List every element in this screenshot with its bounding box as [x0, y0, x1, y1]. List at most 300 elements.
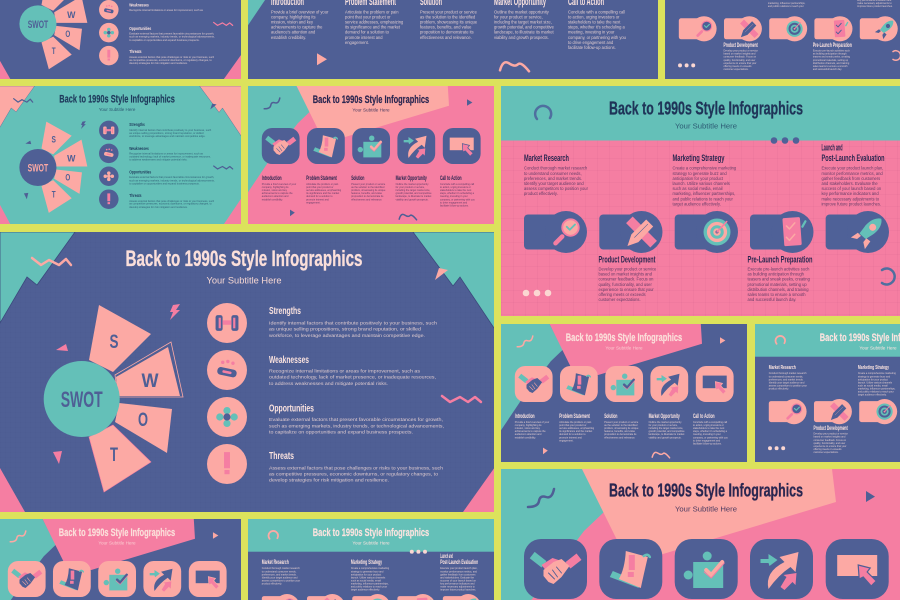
subtitle: Your Subtitle Here: [99, 107, 136, 112]
column: launch evaluation: Execute your product launch plan,: [822, 166, 883, 171]
swot text: Assess external factors that pose challenges or risks to your business, such: [129, 200, 215, 203]
column texts: achievements to capture the: [271, 25, 323, 30]
lower column text: Product Development: [724, 43, 758, 49]
title: Back to 1990s Style Infographics: [566, 332, 682, 344]
swot text: to capitalize on opportunities and expand business prospects.: [129, 182, 200, 185]
column texts: landscape, to illustrate its market: [396, 195, 432, 198]
lightning: [170, 304, 180, 320]
column texts: Present your product or service: [420, 9, 478, 14]
product development text: Develop your product or service: [813, 433, 849, 436]
swot text: as competitive pressures, economic downturns, or regulatory changes, to: [129, 203, 213, 206]
column: pre-launch preparation: [748, 254, 812, 302]
SWOT hub and wedges: [19, 0, 87, 69]
column: launch evaluation: [822, 143, 884, 206]
hub circle: [44, 361, 120, 437]
icon: weaknesses: [207, 350, 247, 390]
column texts: Execute your product launch plan,: [440, 567, 478, 570]
column texts: promote interest and: [559, 436, 582, 439]
tail of top column text: make necessary adjustments to: [857, 2, 892, 5]
dots: [410, 550, 427, 554]
slide: five-step navy: [501, 324, 747, 462]
title: Back to 1990s Style Infographics: [609, 481, 803, 501]
column text: Conduct thorough market research: [769, 372, 807, 375]
pink corner bottom-left: [0, 468, 25, 512]
text: weaknesses, opportunities, threats: develop strategies for risk mitigation and resilience.: [129, 62, 188, 65]
lower column text: as building anticipation through: [813, 53, 847, 56]
column: product development: based on market insights and: [598, 272, 653, 277]
column text: Create a comprehensive marketing: [858, 372, 896, 375]
column texts: Outline the market opportunity: [494, 9, 550, 14]
text: opportunities: to capitalize on opportunities and expand business prospects.: [269, 430, 413, 435]
column: launch evaluation: gather feedback from customers: [822, 176, 880, 181]
column texts: Marketing Strategy: [351, 560, 382, 566]
zigzag right: [442, 396, 481, 402]
column texts: Conclude with a compelling call: [440, 183, 475, 186]
column text: and public relations to reach your: [858, 391, 894, 394]
column text: such as social media, email: [858, 384, 888, 387]
text: threats: as competitive pressures, economic downturns, or regulatory changes, to: [269, 471, 438, 476]
text: weaknesses: Weaknesses: [269, 355, 309, 366]
icon discs: [99, 121, 119, 209]
column texts: audience's attention and: [515, 433, 542, 436]
icon tiles: [515, 366, 734, 402]
swot text: Evaluate external factors that present favorable circumstances for growth,: [129, 176, 215, 179]
column: marketing strategy: and public relations to reach your: [672, 196, 733, 201]
column: market research: assess competitors to position your: [524, 186, 589, 191]
column text: [769, 365, 896, 397]
column: marketing strategy: Create a comprehensive marketing: [672, 166, 737, 171]
column texts: promote interest and: [345, 35, 383, 40]
column texts: achievements to capture the: [515, 430, 546, 433]
decorations: [264, 98, 472, 220]
column texts: including the target market size,: [649, 427, 684, 430]
salmon title shape: [297, 86, 449, 137]
column: market research: preferences, and market trends.: [524, 176, 582, 181]
text: opportunities: [269, 404, 444, 435]
column texts: features, benefits, and value: [351, 192, 383, 195]
column texts: assess competitors to position your: [262, 579, 300, 582]
column texts: Market Opportunity: [649, 413, 680, 420]
column texts: as the solution to the identified: [604, 424, 638, 427]
text: strengths: workforce, to leverage advantages and maintain competitive edge.: [269, 333, 425, 338]
column texts: steps, whether it's scheduling a: [693, 430, 728, 433]
tile: arrows: [750, 539, 813, 599]
product development text: offering meets or exceeds: [813, 448, 842, 451]
column texts: [515, 413, 728, 445]
column texts: launch. Utilize various channels: [351, 576, 386, 579]
slide: roadmap thumbnail top-right: [665, 0, 900, 79]
column texts: company, highlighting its: [271, 14, 316, 19]
lower column text: and successful launch day.: [813, 68, 842, 71]
column: pre-launch preparation: Execute pre-launch activities such: [748, 266, 810, 272]
column texts: key performance indicators and: [440, 583, 475, 586]
teal shape: [501, 324, 563, 430]
corner shapes: [0, 54, 242, 79]
text: threats: develop strategies for risk mitigation and resilience.: [269, 478, 389, 483]
wedge W: [115, 342, 183, 397]
swot text: workforce, to leverage advantages and maintain competitive edge.: [129, 135, 206, 138]
swot text: outdated technology, lack of market presence, or inadequate resources,: [129, 156, 211, 159]
column: market research: to understand consumer needs,: [524, 171, 582, 176]
column text: product effectively.: [769, 388, 789, 391]
column text: marketing, influencer partnerships,: [858, 388, 896, 391]
header dots: [771, 137, 799, 144]
column: pre-launch preparation: promotional materials, setting up: [748, 282, 807, 287]
column texts: as the solution to the identified: [420, 14, 476, 19]
tile: puzzle: [675, 539, 738, 599]
column texts: strategy to generate buzz and: [351, 570, 384, 573]
slide: five-step pink large: [501, 469, 900, 600]
product development text: Product Development: [813, 426, 848, 432]
subtitle: Your Subtitle Here: [98, 540, 136, 545]
text: weaknesses, opportunities, threats: Assess external factors that pose challenges or risks to your business, such: [129, 56, 215, 59]
column texts: Articulate the problem or pain: [345, 9, 399, 14]
column texts: marketing, influencer partnerships,: [351, 583, 389, 586]
teal shape: [501, 469, 604, 600]
ring decoration: [535, 106, 551, 119]
subtitle: Your Subtitle Here: [352, 107, 390, 112]
step tabs: [262, 594, 481, 600]
column texts: Problem Statement: [559, 413, 590, 420]
slide: SWOT thumbnail top-left: [0, 0, 241, 79]
column texts: engagement.: [345, 40, 369, 45]
column texts: service addresses, emphasizing: [306, 189, 342, 192]
column texts: to drive engagement and: [440, 201, 468, 204]
column: marketing strategy: marketing, influencer partnerships,: [672, 191, 735, 196]
text: weaknesses, opportunities, threats: Recognize internal limitations or areas for improvement, such as: [129, 9, 204, 12]
column texts: company, highlighting its: [515, 424, 542, 427]
title: Back to 1990s Style Infographics: [313, 94, 429, 106]
column: marketing strategy: [672, 153, 737, 206]
wedge S: [89, 305, 151, 372]
column texts: gather feedback from customers: [440, 573, 476, 576]
column texts: mission, vision and key: [515, 427, 541, 430]
column texts: facilitate follow-up actions.: [440, 204, 469, 207]
swot text: such as emerging markets, industry trends, or technological advancements,: [129, 179, 215, 182]
column texts: effectiveness and relevance.: [351, 198, 383, 201]
column texts: service addresses, emphasizing: [559, 427, 595, 430]
title: Back to 1990s Style Infographics: [313, 527, 429, 539]
lower column text: offering meets or exceeds: [724, 65, 752, 68]
corner shapes: [0, 86, 242, 224]
column text: launch. Utilize various channels: [858, 381, 893, 384]
column texts: problem, showcasing its unique: [420, 20, 478, 24]
column texts: proposition to demonstrate its: [351, 195, 384, 198]
subtitle: Your Subtitle Here: [675, 121, 737, 130]
slide: SWOT main navy: [0, 232, 494, 512]
column texts: Outline the market opportunity: [649, 421, 682, 424]
column texts: meeting, investing in your: [693, 433, 721, 436]
column: pre-launch preparation: sales teams to ensure a smooth: [748, 292, 806, 297]
column texts: Outline the market opportunity: [396, 183, 429, 186]
column texts: company, highlighting its: [262, 186, 289, 189]
column texts: achievements to capture the: [262, 192, 293, 195]
column texts: proposition to demonstrate its: [604, 433, 637, 436]
icon: opportunities: [207, 397, 247, 437]
column: launch evaluation: Launch and: [822, 143, 842, 153]
text: threats: [269, 451, 443, 483]
column: launch evaluation: monitor performance metrics, and: [822, 171, 883, 176]
column texts: anticipation for your product: [351, 573, 381, 576]
lower column text: Execute pre-launch activities such: [813, 50, 850, 53]
column texts: to drive engagement and: [693, 439, 721, 442]
column texts: engagement.: [559, 439, 574, 442]
subtitle: Your Subtitle Here: [206, 275, 282, 285]
text: opportunities: Opportunities: [269, 404, 314, 415]
lower column text: quality, functionality, and user: [724, 59, 755, 62]
product development text: based on market insights and: [813, 436, 846, 439]
teal header band: [501, 86, 900, 140]
slide: roadmap navy bottom-middle: [248, 519, 494, 600]
text: weaknesses, opportunities, threats: as competitive pressures, economic downturns, or regulatory changes, to: [129, 59, 212, 62]
column texts: steps, whether it's scheduling a: [440, 192, 475, 195]
swot text: Threats: [129, 193, 142, 199]
tail of top column text: improve future product launches.: [857, 5, 893, 8]
wedge T: [89, 425, 151, 492]
column texts: point that your product or: [345, 14, 391, 19]
column texts: establish credibility.: [271, 35, 306, 40]
column texts: including the target market size,: [494, 20, 552, 24]
column texts: point that your product or: [306, 186, 334, 189]
product development text: quality, functionality, and user: [813, 442, 845, 445]
column: product development: [598, 254, 657, 302]
title: Back to 1990s Style Infographics: [59, 527, 175, 539]
zigzag top-left: [32, 258, 71, 265]
ring decoration: [893, 51, 900, 60]
teal shape: [248, 0, 351, 25]
column: product development: consumer feedback. Focus on: [598, 277, 654, 282]
column: marketing strategy: target audience effectively.: [672, 201, 721, 206]
triangle top-right: [435, 268, 448, 280]
lower column text: based on market insights and: [724, 53, 756, 56]
column: market research: Identify your target audience and: [524, 181, 584, 186]
subtitle: Your Subtitle Here: [675, 504, 737, 513]
arrow decoration: [317, 53, 327, 65]
column texts: its significance and the market: [345, 25, 401, 30]
column texts: for your product or service,: [494, 14, 543, 19]
column texts: point that your product or: [559, 424, 587, 427]
decorations: [10, 531, 218, 542]
column texts: demand for a solution to: [559, 433, 586, 436]
column texts: to action, urging investors or: [440, 186, 471, 189]
teal shape: [248, 86, 310, 192]
text: strengths: [269, 306, 437, 338]
pink title shape: [43, 519, 195, 570]
icon tiles: [8, 561, 227, 597]
text: strengths: as unique selling propositions, strong brand reputation, or skilled: [269, 327, 421, 332]
column texts: [271, 0, 626, 50]
column: product development: customer expectations.: [598, 297, 641, 302]
text: weaknesses: outdated technology, lack of market presence, or inadequate resources,: [269, 375, 436, 380]
column texts: as the solution to the identified: [351, 186, 385, 189]
text: weaknesses: Recognize internal limitations or areas for improvement, such as: [269, 369, 421, 374]
column: marketing strategy: strategy to generate buzz and: [672, 171, 727, 176]
slide: SWOT teal left: [0, 86, 241, 224]
column texts: engagement.: [306, 201, 321, 204]
column texts: its significance and the market: [306, 192, 340, 195]
icon: strengths: [207, 303, 247, 343]
column texts: [262, 554, 478, 592]
swot text: develop strategies for risk mitigation and resilience.: [129, 206, 188, 209]
text: weaknesses: to address weaknesses and mitigate potential risks.: [269, 381, 388, 386]
title: Back to 1990s Style Infographics: [126, 246, 362, 271]
column texts: Market Opportunity: [396, 175, 427, 182]
text: weaknesses, opportunities, threats: Opportunities: [129, 26, 151, 32]
column texts: facilitate follow-up actions.: [568, 45, 616, 50]
column texts: stakeholders to take the next: [440, 189, 472, 192]
column texts: Provide a brief overview of your: [262, 183, 296, 186]
tail of top column text: [768, 0, 893, 8]
lower column text: [724, 43, 852, 71]
column: marketing strategy: launch. Utilize various channels: [672, 181, 730, 186]
column: market research: product effectively.: [524, 191, 558, 196]
column texts: viability and growth prospects.: [396, 198, 429, 201]
light dots: [523, 290, 551, 296]
slide: five-step thumbnail top-middle: [248, 0, 658, 79]
column texts: and public relations to reach your: [351, 586, 387, 589]
column texts: and stakeholders. Evaluate the: [440, 576, 475, 579]
product development text: [813, 426, 849, 454]
column: marketing strategy: such as social media, email: [672, 186, 723, 191]
column texts: to action, urging investors or: [568, 14, 620, 19]
lower column text: customer expectations.: [724, 68, 749, 71]
column: launch evaluation: make necessary adjustments to: [822, 196, 880, 201]
lower column text: experience to ensure that your: [724, 62, 757, 65]
lower column text: promotional materials, setting up: [813, 59, 849, 62]
lower column text: Pre-Launch Preparation: [813, 43, 852, 49]
column texts: to drive engagement and: [568, 40, 614, 45]
column texts: to action, urging investors or: [693, 424, 724, 427]
slide: roadmap pink right: [501, 86, 900, 316]
product development text: consumer feedback. Focus on: [813, 439, 847, 442]
product development text: experience to ensure that your: [813, 445, 847, 448]
column texts: viability and growth prospects.: [649, 436, 682, 439]
text: strengths: Strengths: [269, 306, 301, 317]
column texts: product effectively.: [262, 583, 282, 586]
column texts: features, benefits, and value: [420, 25, 472, 30]
SWOT diagram: T: [52, 190, 56, 200]
column texts: mission, vision and key: [262, 189, 288, 192]
column: marketing strategy: anticipation for your product: [672, 176, 724, 181]
column texts: make necessary adjustments to: [440, 586, 475, 589]
swot text: [129, 122, 215, 209]
column text: target audience effectively.: [858, 394, 887, 397]
play triangle: [866, 491, 875, 502]
column texts: company, or partnering with you: [440, 198, 475, 201]
title: Back to 1990s Style Infographics: [59, 94, 175, 106]
letter O: O: [138, 410, 148, 431]
swot text: Recognize internal limitations or areas for improvement, such as: [129, 153, 204, 156]
SWOT hub and wedges: T: [52, 46, 56, 56]
slide: five-step navy bottom-left: [0, 519, 241, 600]
column texts: Solution: [604, 413, 617, 420]
salmon title shape: [582, 469, 836, 554]
column texts: problem, showcasing its unique: [604, 427, 639, 430]
subtitle: Your Subtitle Here: [352, 540, 390, 545]
column texts: Provide a brief overview of your: [515, 421, 549, 424]
column: launch evaluation: and stakeholders. Evaluate the: [822, 181, 878, 186]
tile: click: [826, 539, 889, 599]
teal header band: [248, 519, 500, 552]
SWOT hub and wedges: W: [67, 10, 76, 20]
column texts: Articulate the problem or pain: [559, 421, 592, 424]
column texts: target audience effectively.: [351, 589, 380, 592]
SWOT diagram: [44, 305, 183, 492]
column texts: effectiveness and relevance.: [420, 35, 472, 40]
text: weaknesses, opportunities, threats: Weaknesses: [129, 2, 149, 8]
column texts: establish credibility.: [262, 198, 283, 201]
column: product development: Develop your product or service: [598, 266, 657, 272]
column texts: establish credibility.: [515, 436, 536, 439]
step tabs with icons: [769, 399, 897, 424]
lower column text: sales teams to ensure a smooth: [813, 65, 848, 68]
product development text: customer expectations.: [813, 451, 839, 454]
tile: scroll: [599, 539, 662, 599]
pink title shape: [550, 324, 702, 375]
text: threats: Assess external factors that pose challenges or risks to your business, such: [269, 465, 443, 470]
column texts: company, or partnering with you: [568, 35, 626, 40]
column: market research: [524, 153, 589, 196]
decorations: [14, 99, 233, 199]
column texts: landscape, to illustrate its market: [649, 433, 685, 436]
column texts: growth potential, and competitive: [494, 25, 555, 30]
column texts: Problem Statement: [306, 175, 337, 182]
column texts: facilitate follow-up actions.: [693, 442, 722, 445]
tail of top column text: and public relations to reach your: [768, 5, 804, 8]
SWOT diagram: S: [51, 135, 56, 145]
column text: strategy to generate buzz and: [858, 375, 891, 378]
column texts: steps, whether it's scheduling a: [568, 25, 625, 30]
decorations: [517, 336, 725, 458]
column texts: for your product or service,: [396, 186, 425, 189]
column: market research: Market Research: [524, 153, 569, 163]
column texts: landscape, to illustrate its market: [494, 30, 554, 35]
column texts: Create a comprehensive marketing: [351, 567, 390, 570]
column: pre-launch preparation: and successful launch day.: [748, 297, 796, 302]
column: pre-launch preparation: as building anticipation through: [748, 272, 805, 277]
column texts: Articulate the problem or pain: [306, 183, 339, 186]
triangle lower-left: [53, 451, 62, 464]
squiggle: [528, 489, 554, 507]
column texts: Introduction: [515, 413, 535, 420]
column: product development: quality, functionality, and user: [598, 282, 652, 287]
tile: handshake: [524, 539, 587, 599]
column texts: Introduction: [262, 175, 282, 182]
column texts: stakeholders to take the next: [568, 20, 621, 24]
title: Back to 1990s Style Infographics: [609, 98, 803, 118]
column: product development: Product Development: [598, 254, 656, 264]
column: pre-launch preparation: distribution channels, and training: [748, 287, 809, 292]
dots: [678, 63, 695, 67]
text: threats: Threats: [269, 451, 294, 462]
ring decoration: [268, 531, 278, 539]
wedge O: [115, 403, 172, 453]
column texts: Conclude with a compelling call: [693, 421, 728, 424]
column texts: such as social media, email: [351, 579, 381, 582]
column texts: growth potential, and competitive: [396, 192, 432, 195]
letter T: T: [110, 445, 118, 466]
icon tiles: [262, 128, 481, 164]
lower column text: distribution channels, and training: [813, 62, 850, 65]
text: opportunities: such as emerging markets, industry trends, or technological advancements,: [269, 423, 444, 428]
column text: assess competitors to position your: [769, 384, 807, 387]
SWOT diagram: W: [67, 154, 76, 164]
column texts: meeting, investing in your: [440, 195, 468, 198]
column texts: Market Research: [262, 560, 289, 566]
letter W: W: [142, 371, 159, 392]
SWOT diagram: SWOT: [28, 162, 48, 174]
icons discs: [99, 0, 119, 65]
